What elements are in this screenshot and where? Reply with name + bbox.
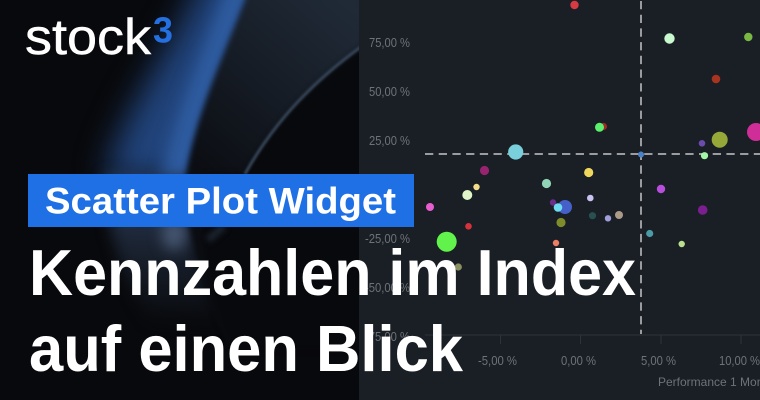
x axis labels: 5,00 % xyxy=(641,353,676,368)
x axis line and ticks xyxy=(425,335,760,344)
title: Kennzahlen im Index xyxy=(29,236,636,309)
y axis labels: 50,00 % xyxy=(369,84,410,99)
median crosshair xyxy=(425,1,760,334)
logo: stock3: stock xyxy=(25,9,152,65)
title: auf einen Blick xyxy=(29,312,464,385)
y axis labels: -25,00 % xyxy=(365,231,410,246)
x axis labels: -5,00 % xyxy=(478,353,517,368)
subtitle badge: Scatter Plot Widget xyxy=(45,180,396,222)
title xyxy=(29,236,636,385)
x axis labels: 0,00 % xyxy=(561,353,596,368)
logo: stock3: 3 xyxy=(153,10,173,50)
x axis labels xyxy=(478,353,760,368)
y axis labels: 75,00 % xyxy=(369,35,410,50)
y axis labels: -50,00 % xyxy=(365,280,410,295)
subtitle badge xyxy=(28,174,414,227)
panel: left background with blue light streak xyxy=(90,0,359,307)
y axis labels: -75,00 % xyxy=(365,329,410,344)
y axis labels: 25,00 % xyxy=(369,133,410,148)
panel: scatter chart background xyxy=(359,0,760,400)
scatter points xyxy=(426,1,760,271)
y axis labels xyxy=(365,35,410,344)
